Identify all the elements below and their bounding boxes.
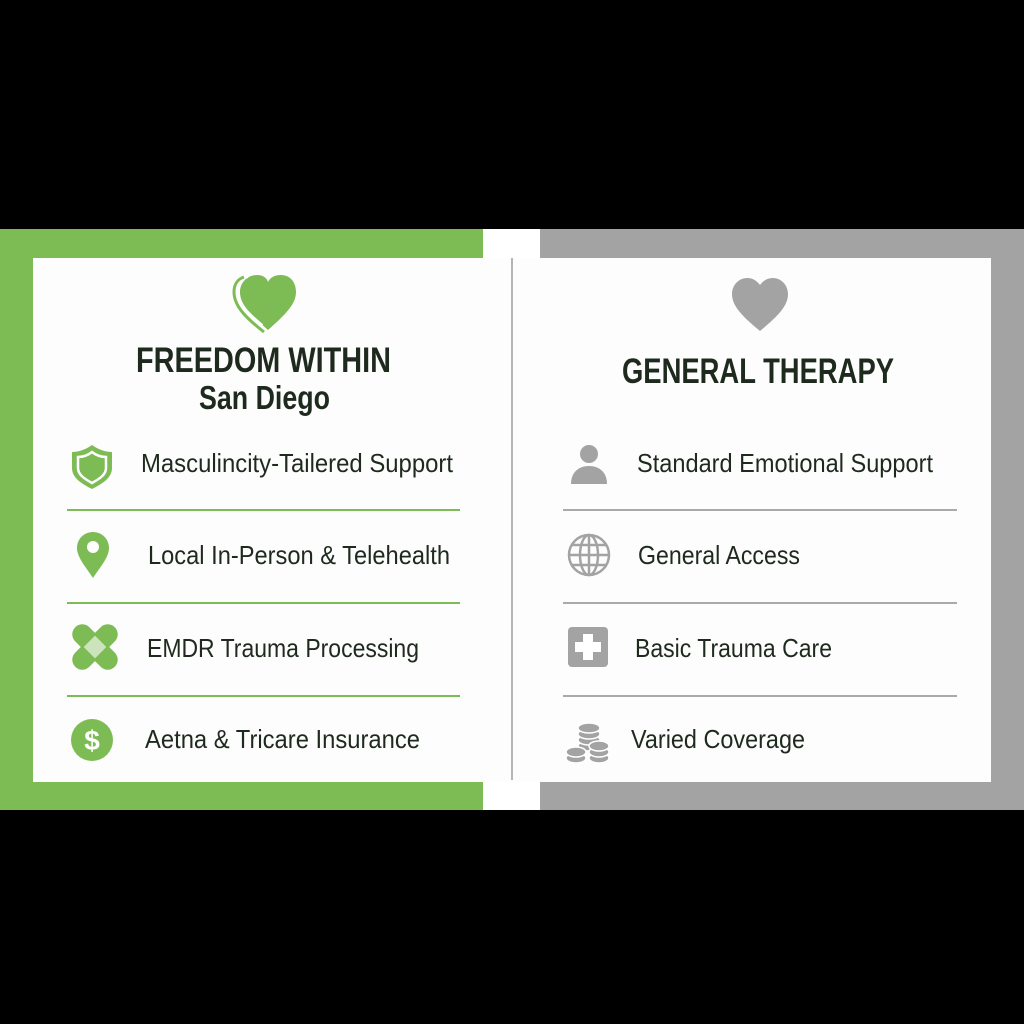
title: GENERAL THERAPY xyxy=(622,352,894,391)
row: varied coverage: Varied Coverage xyxy=(631,724,805,754)
icon: person xyxy=(580,445,598,463)
row: standard support: Standard Emotional Support xyxy=(637,448,934,478)
panel: General Therapy xyxy=(563,278,957,763)
row: insurance xyxy=(71,719,420,761)
icon: coins xyxy=(566,723,609,763)
row: standard support xyxy=(571,445,934,484)
row: local in-person: Local In-Person & Telehealth xyxy=(148,540,450,570)
row: local in-person xyxy=(77,532,450,578)
row: varied coverage xyxy=(566,723,805,763)
panel: Freedom Within xyxy=(67,275,460,761)
icon: bandage cross xyxy=(68,620,122,674)
icon: location pin xyxy=(77,532,109,578)
title: FREEDOM WITHIN xyxy=(136,341,391,380)
icon: dollar xyxy=(71,719,113,761)
icon: shield xyxy=(72,445,112,489)
row: EMDR xyxy=(68,620,419,674)
row: masculinity support xyxy=(72,445,454,489)
title: San Diego xyxy=(199,379,330,416)
icon: globe xyxy=(569,535,609,575)
row: general access: General Access xyxy=(638,540,800,570)
icon: green heart xyxy=(234,275,296,332)
icon: gray heart xyxy=(732,278,788,331)
center divider xyxy=(511,258,513,780)
row: basic trauma xyxy=(568,627,832,667)
row: insurance: Aetna & Tricare Insurance xyxy=(145,724,420,754)
row: insurance: $ xyxy=(84,725,100,756)
row: masculinity support: Masculincity-Tailered Support xyxy=(141,448,454,478)
icon: plus square xyxy=(568,627,608,667)
row: EMDR: EMDR Trauma Processing xyxy=(147,633,419,663)
row: general access xyxy=(569,535,800,575)
row: basic trauma: Basic Trauma Care xyxy=(635,633,832,663)
white comparison panel xyxy=(33,258,991,782)
background band xyxy=(0,229,1024,810)
title xyxy=(136,341,391,416)
